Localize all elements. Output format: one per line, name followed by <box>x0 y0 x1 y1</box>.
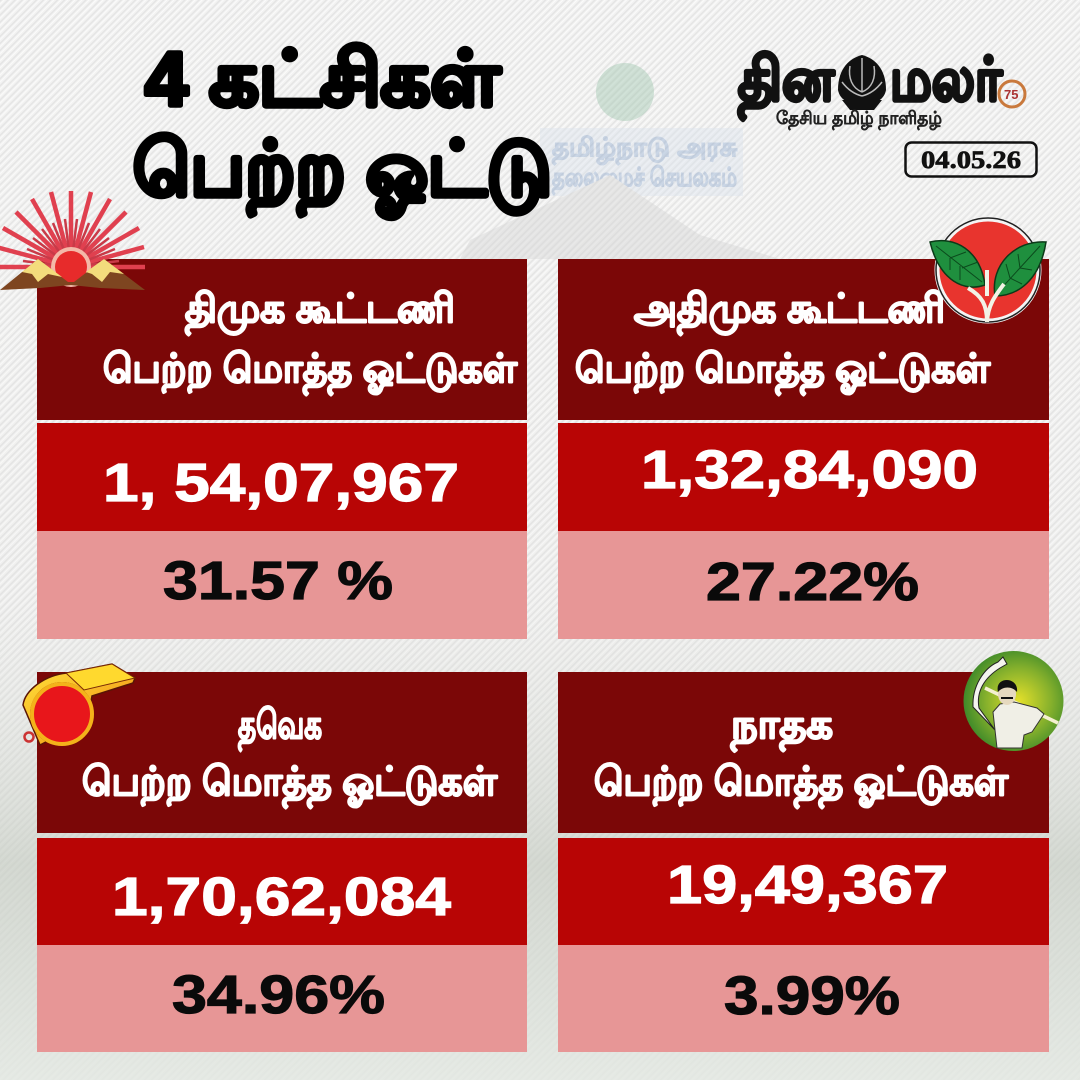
vote count: NTK: 19,49,367 <box>667 855 948 915</box>
heading: TVK <box>82 703 498 809</box>
logo: Dinamalar masthead: 75 <box>1004 87 1018 102</box>
vote count: DMK: 1, 54,07,967 <box>103 453 459 513</box>
panel: TVK <box>37 672 527 1052</box>
icon: whistle <box>23 664 135 746</box>
logo: Dinamalar masthead: தின <box>738 46 835 122</box>
heading: ADMK: பெற்ற மொத்த ஓட்டுகள் <box>575 347 991 396</box>
title: 4 கட்சிகள் <box>145 37 501 122</box>
icon: rising sun <box>0 191 145 290</box>
logo: Dinamalar masthead: மலர் <box>890 46 1003 113</box>
panel: DMK alliance <box>37 259 527 639</box>
heading: ADMK <box>575 287 991 396</box>
vote count: TVK: 1,70,62,084 <box>112 867 451 927</box>
heading: NTK: பெற்ற மொத்த ஓட்டுகள் <box>594 760 1009 809</box>
heading: DMK: திமுக கூட்டணி <box>185 287 455 336</box>
vote share: DMK: 31.57 % <box>163 551 393 611</box>
faint secretariat building emblem: தமிழ்நாடு அரசு <box>552 132 737 165</box>
heading: DMK <box>103 287 518 396</box>
heading: TVK: பெற்ற மொத்த ஓட்டுகள் <box>82 760 498 809</box>
vote share: TVK: 34.96% <box>172 965 385 1025</box>
panel: ADMK alliance <box>558 259 1049 639</box>
panel: NTK <box>558 672 1049 1052</box>
faint secretariat building emblem: தலைமைச் செயலகம் <box>552 162 737 195</box>
vote share: NTK: 3.99% <box>724 966 900 1026</box>
title: பெற்ற ஓட்டு <box>133 127 552 220</box>
logo: Dinamalar masthead: தேசிய தமிழ் நாளிதழ் <box>776 108 942 131</box>
logo: Dinamalar masthead <box>738 46 1025 131</box>
heading: NTK: நாதக <box>730 703 833 752</box>
vote share: ADMK: 27.22% <box>706 552 919 612</box>
vote count: ADMK: 1,32,84,090 <box>641 440 978 500</box>
date badge <box>906 142 1036 176</box>
icon: two leaves <box>930 218 1046 322</box>
faint secretariat building emblem <box>460 63 780 259</box>
heading: NTK <box>594 703 1009 809</box>
title <box>133 37 552 220</box>
icon: lotus <box>838 55 886 110</box>
date badge: 04.05.26 <box>921 147 1021 174</box>
heading: ADMK: அதிமுக கூட்டணி <box>634 287 945 336</box>
heading: DMK: பெற்ற மொத்த ஓட்டுகள் <box>103 347 518 396</box>
icon: farmer with plough <box>964 651 1064 751</box>
heading: TVK: தவெக <box>238 703 322 752</box>
